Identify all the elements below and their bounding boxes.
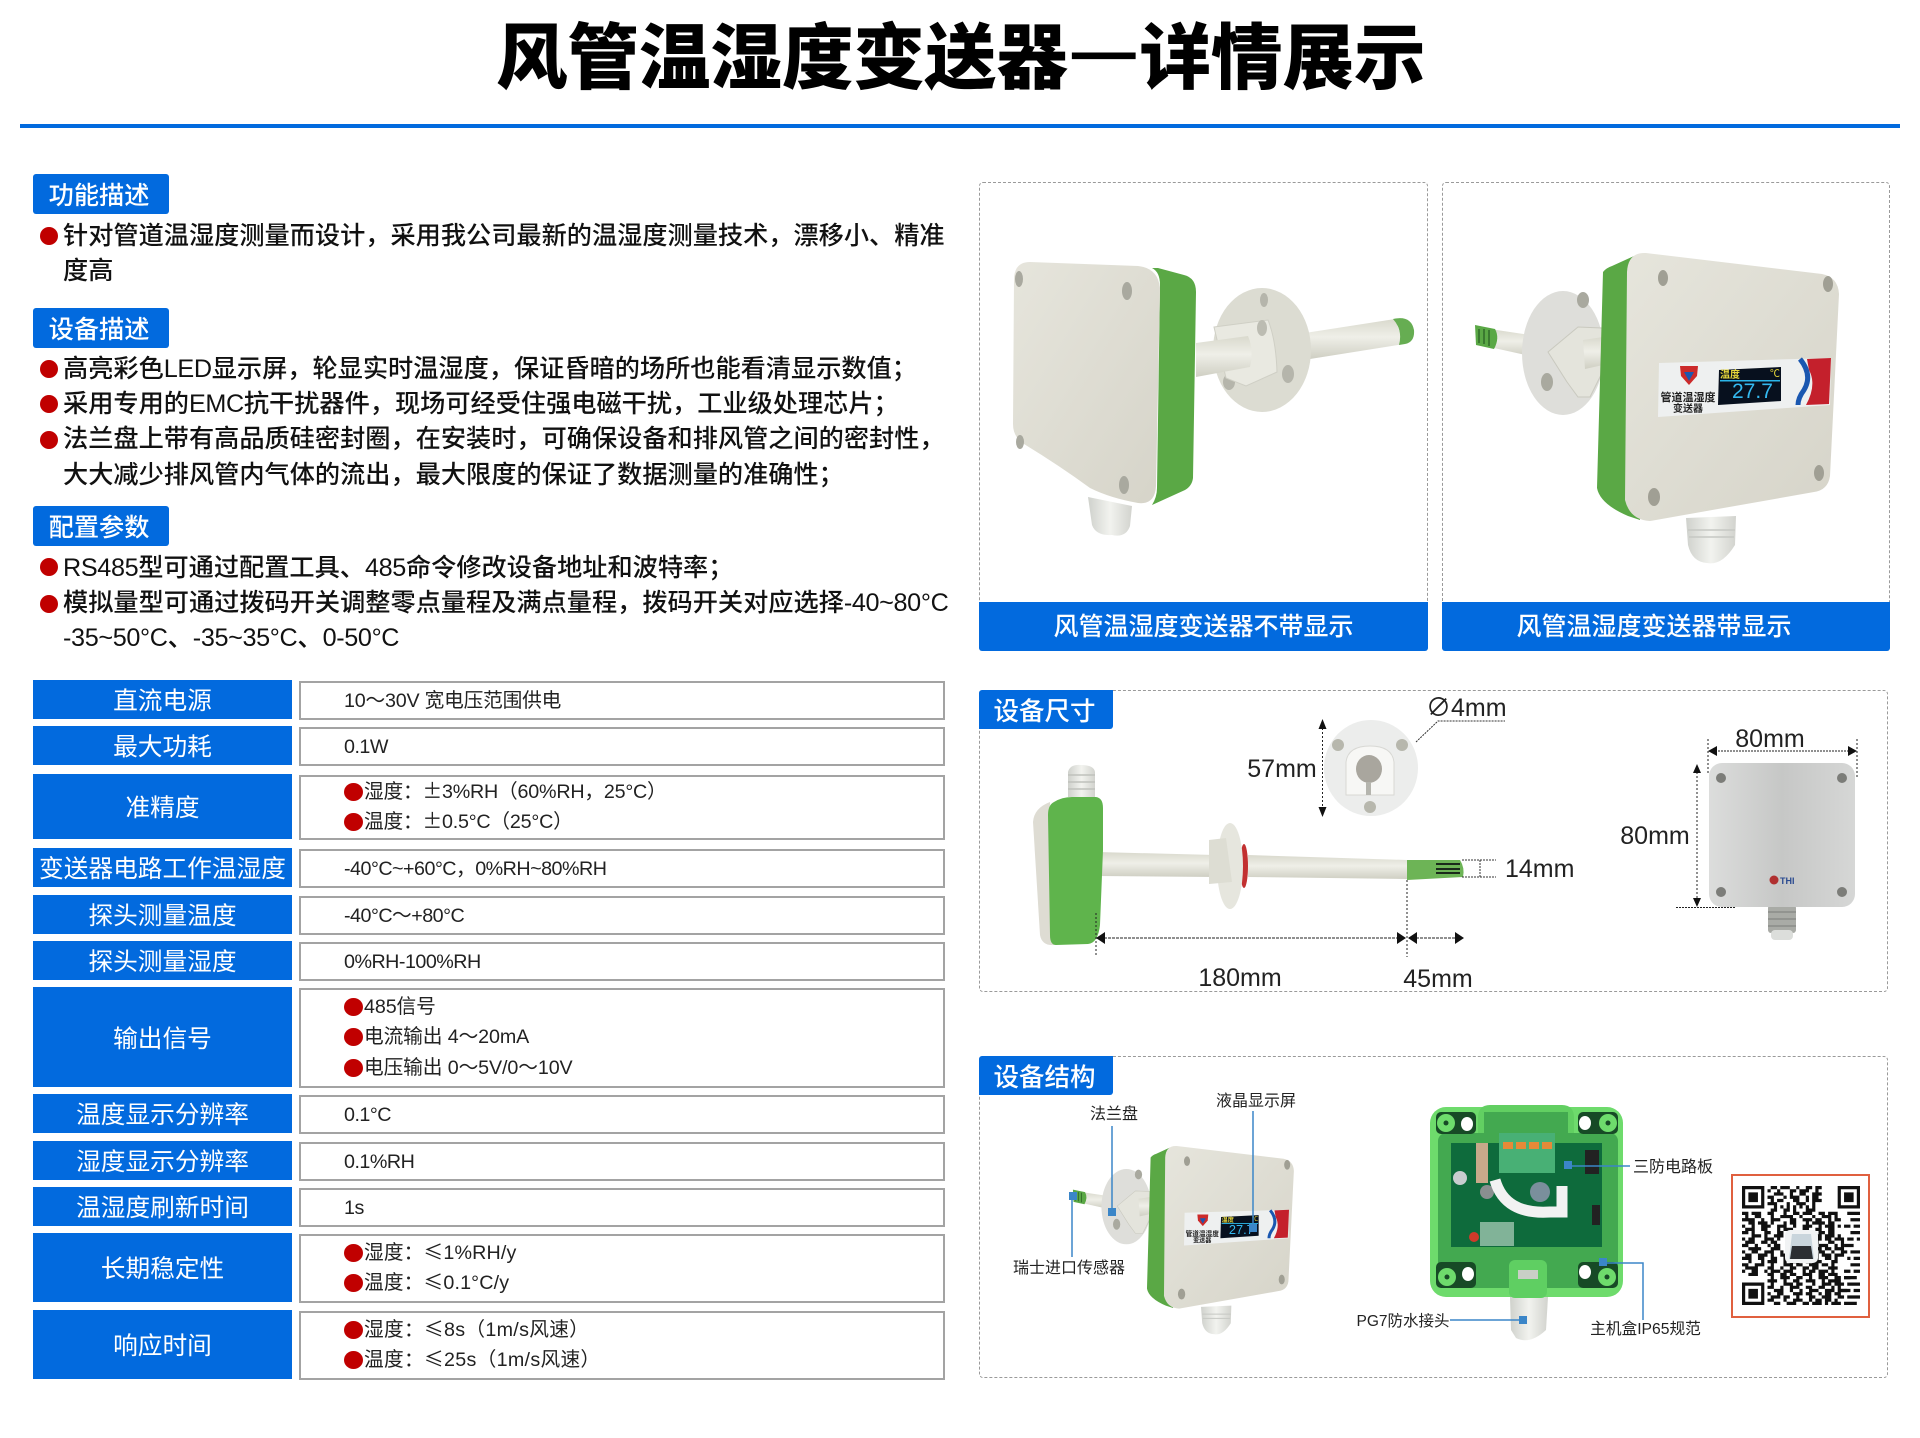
dimension: 45mm: 45mm	[1403, 965, 1473, 993]
row: 探头测量湿度: 0%RH-100%RH	[344, 951, 481, 973]
row: 直流电源: 直流电源	[113, 688, 212, 715]
text block: function description: 度高	[63, 257, 113, 285]
caption: 风管温湿度变送器不带显示	[1053, 613, 1354, 641]
photo: transmitter with display: 变送器	[1673, 402, 1703, 415]
dimension: 14mm: 14mm	[1505, 855, 1574, 883]
panel: product with display	[1442, 182, 1890, 651]
dimension: 14mm	[1462, 855, 1574, 883]
text block: configuration: RS485型可通过配置工具、485命令修改设备地址和波特率；	[63, 554, 733, 582]
panel: device structure	[979, 1056, 1888, 1378]
heading: 设备结构: 设备结构	[993, 1064, 1096, 1092]
photo: transmitter with display: ℃	[1770, 369, 1780, 380]
row: 输出信号: 电流输出 4～20mA	[364, 1026, 529, 1048]
text block: configuration	[40, 554, 948, 652]
caption	[979, 602, 1428, 651]
row: 响应时间: 湿度：≤8s（1m/s风速）	[364, 1313, 589, 1342]
text block: device description: 法兰盘上带有高品质硅密封圈，在安装时，可确保设备和排风管之间的密封性，	[63, 425, 945, 453]
row: 变送器电路工作温湿度: -40°C~+60°C，0%RH~80%RH	[344, 858, 606, 880]
section heading: 功能描述: 功能描述	[49, 182, 149, 210]
flange front view	[1324, 720, 1418, 816]
photo: transmitter with display: 27.7	[1732, 380, 1773, 403]
row: 湿度显示分辨率: 湿度显示分辨率	[76, 1149, 249, 1176]
transmitter photo	[1073, 1146, 1294, 1334]
open enclosure with circuit board	[1430, 1105, 1623, 1340]
caption	[1442, 602, 1890, 651]
callout: 主机盒IP65规范	[1590, 1258, 1701, 1338]
callout: 法兰盘: 法兰盘	[1090, 1104, 1138, 1123]
section heading: 配置参数: 配置参数	[49, 514, 149, 542]
photo: transmitter with display: 管道温湿度	[1660, 390, 1716, 404]
row: 湿度显示分辨率: 0.1%RH	[344, 1151, 414, 1173]
text block: configuration: 模拟量型可通过拨码开关调整零点量程及满点量程，拨码开关对应选择-40~80°C	[63, 589, 948, 617]
rear view of box	[1709, 763, 1855, 940]
section heading: 设备描述	[33, 308, 169, 348]
text block: device description	[40, 355, 945, 489]
row: 准精度	[33, 774, 945, 840]
photo: transmitter with display: 温度	[1720, 368, 1740, 381]
spec table	[33, 680, 945, 1380]
text block: device description: 采用专用的EMC抗干扰器件，现场可经受住强电磁干扰，工业级处理芯片；	[63, 390, 899, 418]
panel: device dimensions	[979, 690, 1888, 992]
dimension: 57mm	[1247, 719, 1326, 817]
row: 探头测量温度: 探头测量温度	[88, 903, 237, 930]
row: 最大功耗: 0.1W	[344, 736, 388, 758]
dimension: 180mm: 180mm	[1198, 964, 1282, 992]
text block: configuration: -35~50°C、-35~35°C、0-50°C	[63, 624, 399, 652]
caption: 风管温湿度变送器带显示	[1516, 613, 1792, 641]
callout: PG7防水接头: PG7防水接头	[1356, 1312, 1450, 1330]
section heading: 配置参数	[33, 506, 169, 546]
row: 准精度: 准精度	[125, 795, 200, 822]
panel: product without display	[979, 182, 1428, 651]
row: 最大功耗: 最大功耗	[113, 734, 212, 761]
row: 输出信号: 电压输出 0～5V/0～10V	[364, 1057, 573, 1079]
row: 输出信号: 输出信号	[113, 1026, 212, 1052]
heading: 设备尺寸: 设备尺寸	[993, 698, 1096, 726]
text block: function description: 针对管道温湿度测量而设计，采用我公司最新的温湿度测量技术，漂移小、精准	[63, 222, 945, 250]
section heading: 功能描述	[33, 174, 169, 214]
callout: 液晶显示屏: 液晶显示屏	[1216, 1092, 1296, 1110]
callout: 三防电路板: 三防电路板	[1633, 1158, 1713, 1176]
callout: 瑞士进口传感器	[1013, 1192, 1125, 1277]
photo: transmitter with display	[1475, 253, 1839, 564]
heading: 设备结构	[979, 1056, 1113, 1095]
row: 长期稳定性: 湿度：≤1%RH/y	[364, 1236, 516, 1265]
row: 长期稳定性: 温度：≤0.1°C/y	[364, 1266, 509, 1295]
dimension: 45mm	[1403, 932, 1473, 993]
row: 探头测量湿度: 探头测量湿度	[88, 949, 237, 976]
row: 探头测量温度	[33, 895, 945, 935]
dimension: 180mm	[1096, 880, 1407, 992]
structure drawing	[1013, 1092, 1870, 1340]
row: 输出信号	[33, 987, 945, 1088]
row: 温湿度刷新时间	[33, 1187, 945, 1227]
text block: device description: 高亮彩色LED显示屏，轮显实时温湿度，保证昏暗的场所也能看清显示数值；	[63, 355, 917, 383]
row: 探头测量温度: -40°C～+80°C	[344, 905, 464, 927]
row: 长期稳定性: 长期稳定性	[101, 1256, 224, 1283]
row: 温度显示分辨率: 0.1°C	[344, 1104, 391, 1126]
row: 变送器电路工作温湿度	[33, 848, 945, 888]
dimension: 80mm height: 80mm	[1620, 822, 1690, 850]
row: 温湿度刷新时间: 温湿度刷新时间	[76, 1195, 249, 1222]
dimension: 57mm: 57mm	[1247, 755, 1317, 783]
dimension: 80mm height	[1620, 764, 1735, 908]
photo: transmitter without display	[1013, 262, 1414, 536]
dimension: 80mm width	[1708, 725, 1857, 777]
row: 温湿度刷新时间: 1s	[344, 1197, 364, 1219]
text block: device description: 大大减少排风管内气体的流出，最大限度的保证了数据测量的准确性；	[63, 461, 844, 489]
callout: PG7防水接头	[1356, 1312, 1527, 1330]
dimension: 4mm hole	[1416, 694, 1507, 742]
side view of transmitter	[1033, 765, 1464, 945]
callout: 液晶显示屏	[1216, 1092, 1296, 1232]
row: 输出信号: 485信号	[364, 996, 436, 1018]
title underline	[20, 124, 1900, 128]
row: 温度显示分辨率	[33, 1094, 945, 1134]
row: 长期稳定性	[33, 1233, 945, 1303]
QR code	[1732, 1175, 1869, 1317]
row: 准精度: 湿度：±3%RH（60%RH，25°C）	[364, 775, 667, 804]
row: 直流电源: 10～30V 宽电压范围供电	[344, 690, 561, 712]
text block: function description	[40, 222, 945, 285]
row: 湿度显示分辨率	[33, 1141, 945, 1181]
callout: 主机盒IP65规范: 主机盒IP65规范	[1590, 1320, 1701, 1338]
dimension: 80mm width: 80mm	[1735, 725, 1805, 753]
callout: 法兰盘	[1090, 1104, 1138, 1216]
row: 响应时间: 温度：≤25s（1m/s风速）	[364, 1343, 600, 1372]
dimension: 4mm hole: ∅4mm	[1426, 694, 1507, 722]
row: 变送器电路工作温湿度: 变送器电路工作温湿度	[39, 856, 286, 883]
callout: 瑞士进口传感器: 瑞士进口传感器	[1013, 1259, 1125, 1277]
row: 响应时间: 响应时间	[113, 1333, 212, 1360]
callout: 三防电路板	[1564, 1158, 1713, 1176]
rear view of box: THI	[1780, 876, 1794, 886]
row: 准精度: 温度：±0.5°C（25°C）	[364, 805, 573, 834]
row: 直流电源	[33, 680, 945, 720]
row: 响应时间	[33, 1310, 945, 1380]
title: 风管温湿度变送器—详情展示	[496, 0, 1426, 104]
heading: 设备尺寸	[979, 690, 1113, 729]
row: 探头测量湿度	[33, 941, 945, 981]
dimension drawing	[1033, 694, 1858, 993]
section heading: 设备描述: 设备描述	[49, 316, 149, 344]
row: 温度显示分辨率: 温度显示分辨率	[76, 1102, 249, 1129]
row: 最大功耗	[33, 726, 945, 766]
